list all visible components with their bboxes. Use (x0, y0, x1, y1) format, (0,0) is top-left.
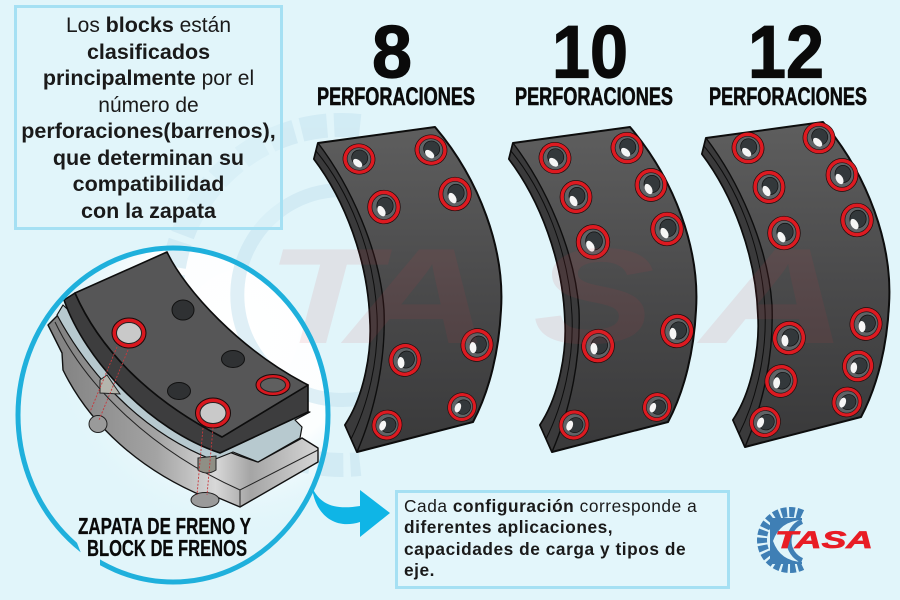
brake block with 10 holes (509, 127, 699, 452)
background watermark: TASA wordmark: T (266, 221, 392, 372)
brake block with 8 holes (314, 127, 501, 452)
threaded rivets (89, 375, 219, 508)
background watermark: TASA wordmark: S (533, 220, 655, 373)
caption (72, 513, 251, 566)
text box: blocks classification (14, 5, 283, 230)
text box: blocks classification: número de (98, 94, 199, 116)
text box: blocks classification: perforaciones(barrenos), (21, 119, 276, 143)
text box: blocks classification: que determinan su (53, 146, 244, 170)
caption: ZAPATA DE FRENO Y (78, 513, 251, 539)
heading: 12 perforaciones (709, 10, 867, 111)
heading: 10 perforaciones: 10 (552, 10, 628, 94)
text box: configuration note (395, 490, 730, 589)
block top face (75, 252, 308, 437)
heading: 8 perforaciones (317, 10, 475, 111)
brake shoe middle plate (57, 305, 310, 462)
red dotted guide lines (90, 347, 213, 495)
open holes in block (168, 300, 244, 400)
arrow pointing to configuration note (312, 487, 390, 537)
text box: blocks classification: con la zapata (81, 198, 216, 222)
logo: TASA (762, 512, 873, 568)
heading: 10 perforaciones (515, 10, 673, 111)
text box: blocks classification: Los blocks están (66, 13, 231, 37)
brake block with 12 holes (702, 119, 889, 447)
callout circle background (18, 248, 328, 582)
caption: BLOCK DE FRENOS (87, 535, 247, 561)
brake shoe steel plate (48, 313, 318, 507)
text box: blocks classification: clasificados (87, 40, 210, 64)
highlighted rivet holes (112, 318, 290, 428)
heading: 12 perforaciones: 12 (748, 10, 824, 94)
block side (64, 293, 308, 453)
text box: configuration note: diferentes aplicaciones, (404, 517, 613, 537)
background watermark: TASA wordmark: A (696, 220, 848, 372)
heading: 8 perforaciones: PERFORACIONES (317, 83, 475, 111)
text box: configuration note: Cada configuración corresponde a (404, 496, 697, 516)
heading: 10 perforaciones: PERFORACIONES (515, 83, 673, 111)
text box: configuration note: eje. (404, 560, 435, 580)
text box: blocks classification: compatibilidad (73, 172, 224, 196)
background watermark: blue gear arcs (172, 125, 380, 465)
callout circle outline (18, 248, 328, 582)
background watermark: TASA wordmark (266, 220, 848, 373)
background watermark: TASA wordmark: A (340, 220, 492, 372)
detail illustration: brake shoe and block (48, 252, 318, 508)
heading: 8 perforaciones: 8 (372, 10, 412, 94)
text box: blocks classification: principalmente por el (43, 66, 254, 90)
logo: TASA: TASA (775, 527, 873, 554)
text box: configuration note: capacidades de carga y tipos de (404, 539, 686, 559)
